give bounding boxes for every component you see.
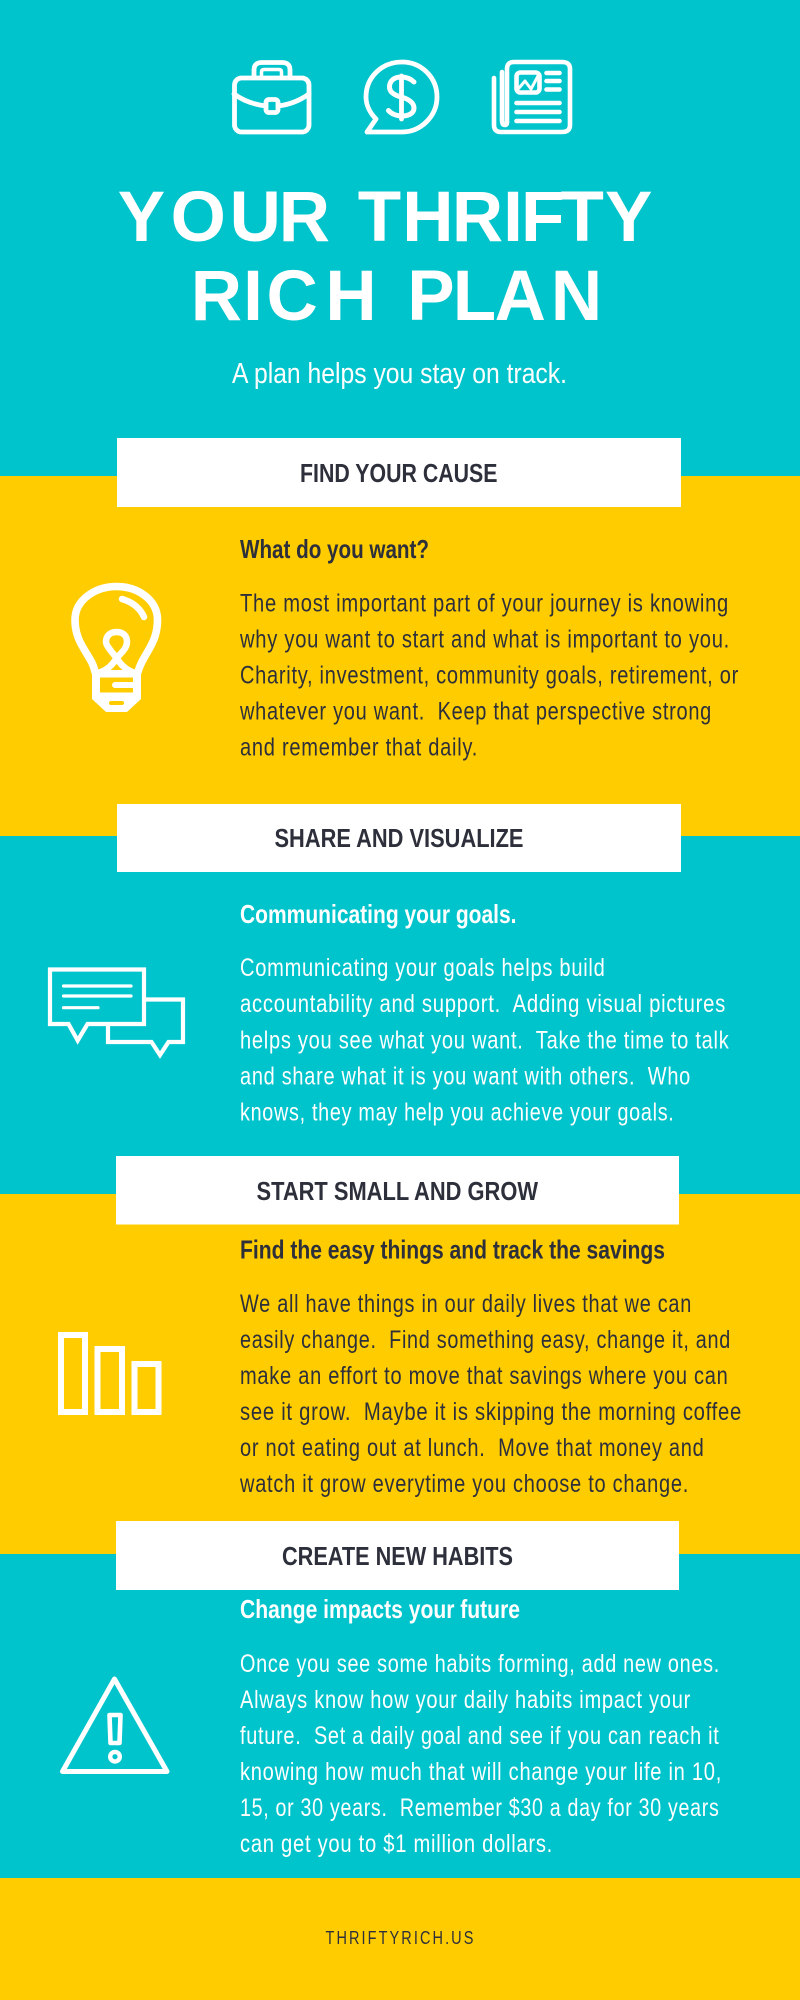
icon: light bulb: [75, 586, 158, 712]
body text: watch it grow everytime you choose to change.: [239, 1470, 689, 1498]
section label: [117, 438, 681, 507]
panel: create new habits: [0, 1521, 800, 1878]
title: YOUR THRIFTY: [118, 178, 652, 257]
section label: FIND YOUR CAUSE: [300, 458, 498, 488]
body text: We all have things in our daily lives that we can: [240, 1290, 692, 1318]
icon: chat bubbles: [50, 970, 183, 1055]
heading: Change impacts your future: [240, 1594, 520, 1624]
heading: Find the easy things and track the savings: [240, 1234, 665, 1264]
title: [118, 178, 652, 336]
section label: SHARE AND VISUALIZE: [274, 823, 524, 853]
body text: and remember that daily.: [240, 734, 478, 762]
heading: Communicating your goals.: [240, 899, 516, 929]
section label: [117, 804, 681, 872]
body text: and share what it is you want with others. Who: [240, 1062, 691, 1090]
section label: [116, 1521, 679, 1590]
footer website text: THRIFTYRICH.US: [326, 1928, 476, 1948]
panel: start small and grow: [0, 1156, 800, 1554]
icon: warning triangle: [62, 1679, 167, 1772]
heading: What do you want?: [240, 534, 429, 564]
section label: CREATE NEW HABITS: [282, 1541, 513, 1571]
icon: newspaper: [494, 62, 570, 132]
panel: header: [0, 0, 800, 476]
body text: [240, 1650, 722, 1858]
body text: [240, 954, 730, 1126]
body text: [239, 1290, 742, 1498]
icon: dollar speech bubble: [366, 62, 437, 132]
panel: share and visualize: [0, 804, 800, 1194]
section label: START SMALL AND GROW: [256, 1176, 538, 1206]
body text: Communicating your goals helps build: [240, 954, 606, 982]
body text: knows, they may help you achieve your goals.: [240, 1098, 674, 1126]
panel: find your cause: [0, 438, 800, 836]
subtitle: A plan helps you stay on track.: [232, 358, 567, 390]
title: RICH PLAN: [191, 257, 602, 336]
body text: Always know how your daily habits impact your: [240, 1686, 691, 1714]
body text: [239, 590, 739, 762]
section label: [116, 1156, 679, 1224]
icon: bar chart: [61, 1335, 158, 1412]
panel: footer: [0, 1878, 800, 2000]
icon: briefcase: [234, 62, 309, 132]
body text: can get you to $1 million dollars.: [240, 1830, 553, 1858]
